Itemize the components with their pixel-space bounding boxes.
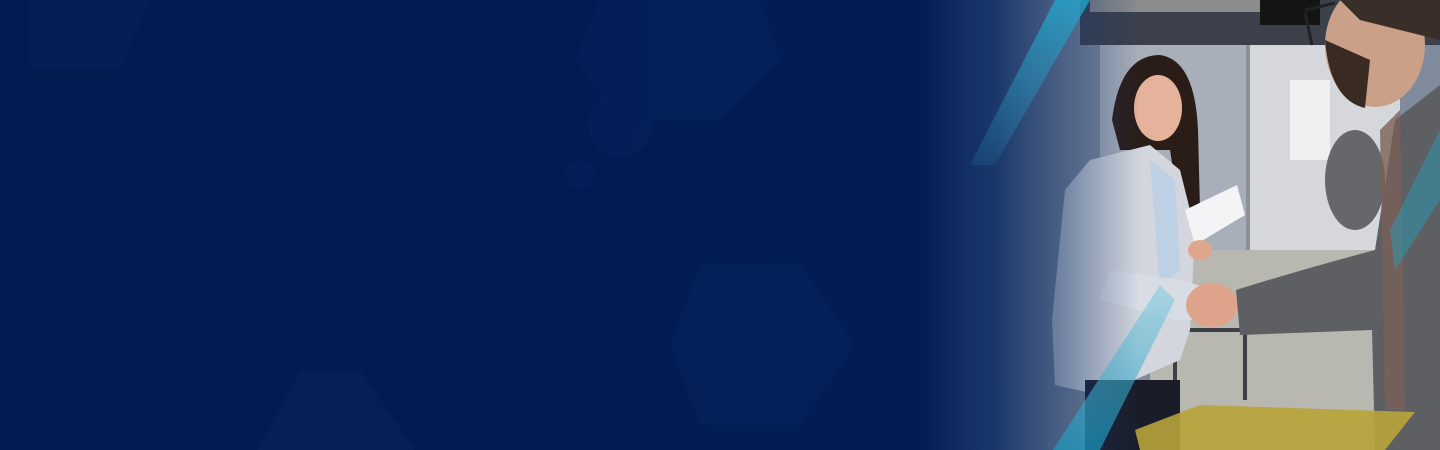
photo: office scene (930, 0, 1440, 450)
gradient fade (920, 0, 1140, 450)
man (1236, 0, 1440, 450)
handshake (1186, 283, 1238, 327)
chair (1175, 300, 1245, 400)
background person (1325, 130, 1385, 230)
decorative hexagons (30, 0, 855, 450)
folder (1135, 405, 1415, 450)
cyan stripe bottom (1053, 285, 1175, 450)
glass wall (1100, 45, 1250, 255)
woman (1052, 55, 1245, 450)
ceiling (1080, 0, 1440, 45)
cyan stripe top (970, 0, 1090, 165)
floor (1150, 250, 1390, 450)
teal stripe right (1390, 130, 1440, 270)
